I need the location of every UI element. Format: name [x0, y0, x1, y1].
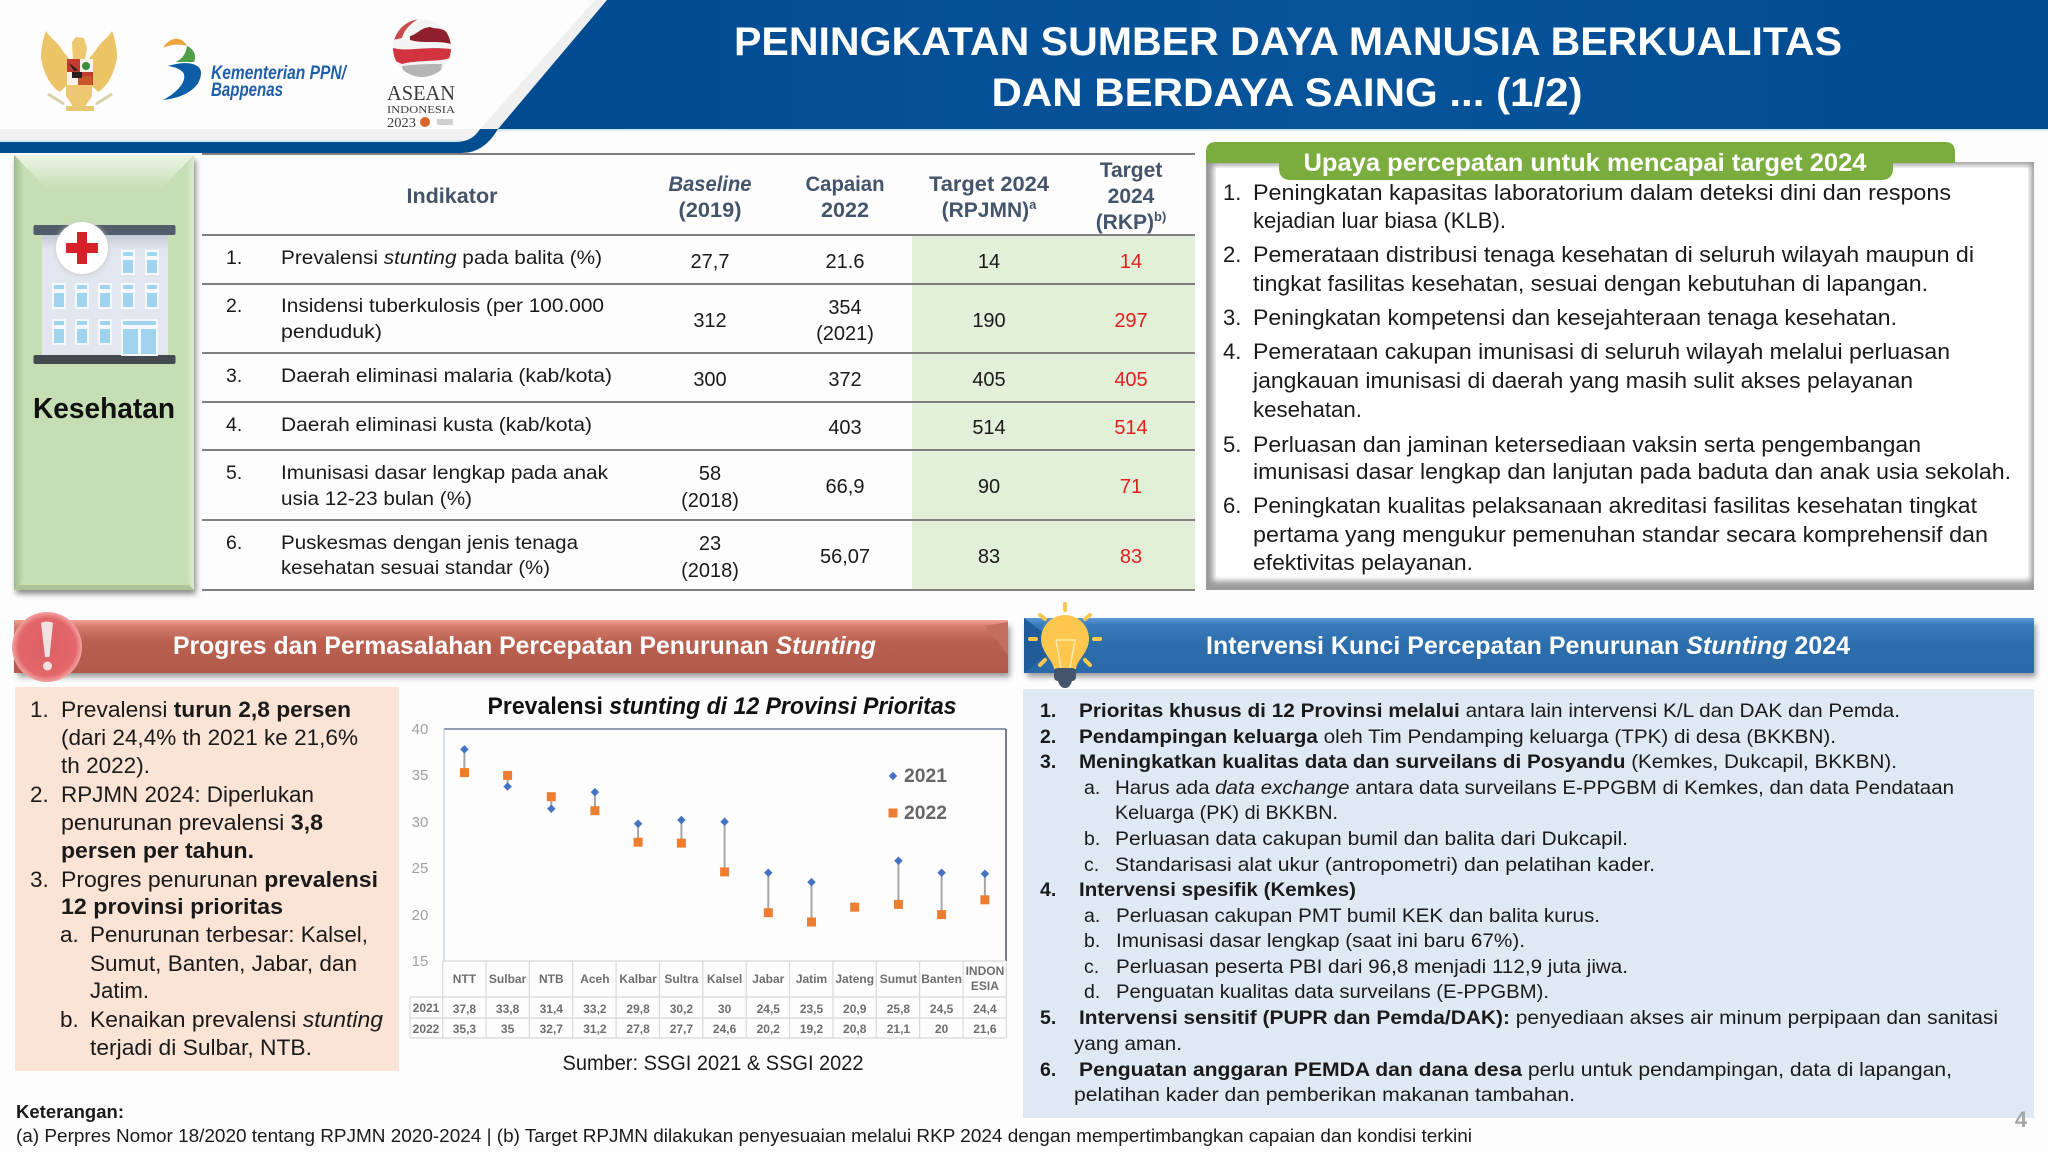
- table: health indicators: [202, 154, 1195, 590]
- item 6: pertama yang mengukur pemenuhan standar secara komprehensif dan: [1253, 522, 1988, 547]
- legend: 2021: [904, 766, 947, 787]
- note 3: Kenaikan prevalensi stunting: [90, 1007, 383, 1032]
- note 3: Sumut, Banten, Jabar, dan: [90, 951, 357, 976]
- note 2: penurunan prevalensi 3,8: [61, 810, 323, 835]
- item 5: imunisasi dasar lengkap dan lanjutan pada baduta dan anak usia sekolah.: [1253, 459, 2011, 484]
- green heading tab: [1206, 142, 1955, 180]
- row 6: (2018): [681, 560, 739, 582]
- intervention 3: 3.: [1040, 751, 1056, 773]
- row 6: [226, 532, 1142, 582]
- panel: Kesehatan sector: [14, 155, 196, 594]
- item 4: [1223, 339, 1950, 422]
- intervention 4: b.: [1084, 930, 1100, 952]
- data table 2022 values: 21,6: [973, 1022, 997, 1036]
- footnote: Keterangan:: [16, 1101, 124, 1122]
- intervention 3: Harus ada data exchange antara data surveilans E-PPGBM di Kemkes, dan data Pendataan: [1115, 777, 1954, 799]
- y axis labels: 25: [412, 860, 428, 877]
- row 5: usia 12-23 bulan (%): [281, 488, 472, 510]
- item 2: Pemerataan distribusi tenaga kesehatan di seluruh wilayah maupun di: [1253, 242, 1974, 267]
- row 6: 6.: [226, 532, 242, 554]
- intervention 4: d.: [1084, 981, 1100, 1003]
- data table 2021 values: [413, 1001, 997, 1016]
- table header row: Capaian: [806, 173, 884, 196]
- row 2: Insidensi tuberkulosis (per 100.000: [281, 295, 604, 317]
- data table 2021 values: 30,2: [670, 1002, 693, 1016]
- chart source: Sumber: SSGI 2021 & SSGI 2022: [562, 1052, 864, 1075]
- data table 2022 values: 20,2: [757, 1022, 780, 1036]
- page number: 4: [2015, 1107, 2028, 1132]
- row 3: 405: [972, 369, 1006, 391]
- logo: ASEAN Indonesia 2023: [387, 19, 455, 131]
- intervention 5: 5.: [1040, 1007, 1056, 1029]
- row 4: [226, 414, 1148, 439]
- note 3: Penurunan terbesar: Kalsel,: [90, 922, 368, 947]
- connectors: [464, 749, 985, 922]
- row 5: [226, 462, 1142, 512]
- title: PENINGKATAN SUMBER DAYA MANUSIA BERKUALITAS: [734, 20, 1842, 64]
- data table 2022 values: 24,6: [713, 1022, 737, 1036]
- item 6: [1223, 493, 1988, 575]
- data table 2022 values: 21,1: [887, 1022, 910, 1036]
- logo: ASEAN Indonesia 2023: INDONESIA: [387, 104, 455, 116]
- data table province labels: Sultra: [664, 972, 699, 986]
- table header row: Target: [1100, 159, 1162, 182]
- y axis labels: [412, 721, 428, 970]
- logo: Kementerian PPN/Bappenas: Bappenas: [211, 80, 283, 101]
- note 1: Prevalensi turun 2,8 persen: [61, 697, 351, 722]
- title: [734, 20, 1842, 115]
- logo: Kementerian PPN/Bappenas: Kementerian PPN/: [211, 63, 347, 84]
- row 3: 300: [693, 369, 727, 391]
- data table province labels: ESIA: [971, 979, 999, 993]
- row 2: 190: [972, 310, 1006, 332]
- heading: Kesehatan: Kesehatan: [33, 393, 175, 425]
- y axis labels: 40: [412, 721, 428, 738]
- item 1: 1.: [1223, 180, 1241, 205]
- row 1: 1.: [226, 247, 242, 269]
- note 3: a.: [60, 922, 79, 947]
- row 6: 56,07: [820, 546, 870, 568]
- banner: Progres dan Permasalahan: Progres dan Permasalahan Percepatan Penurunan Stunting: [173, 632, 876, 660]
- row 5: 90: [978, 476, 1000, 498]
- table header row: Target 2024: [929, 173, 1049, 196]
- item 6: 6.: [1223, 493, 1241, 518]
- data table province labels: NTB: [539, 972, 564, 986]
- intervention 3: b.: [1084, 828, 1100, 850]
- series 2022 markers: [460, 768, 989, 926]
- data table 2021 values: 2021: [413, 1001, 440, 1015]
- intervention 3: Meningkatkan kualitas data dan surveilans di Posyandu (Kemkes, Dukcapil, BKKBN).: [1079, 751, 1897, 773]
- data table 2021 values: 25,8: [887, 1002, 910, 1016]
- item 1: kejadian luar biasa (KLB).: [1253, 208, 1506, 233]
- data table 2021 values: 20,9: [843, 1002, 867, 1016]
- table header row: a: [1029, 197, 1037, 212]
- item 2: 2.: [1223, 242, 1241, 267]
- note 1: th 2022).: [61, 753, 150, 778]
- row 2: 2.: [226, 295, 242, 317]
- table header row: Baseline: [668, 173, 752, 196]
- item 3: 3.: [1223, 305, 1241, 330]
- logo: ASEAN Indonesia 2023: ASEAN: [387, 81, 455, 105]
- item 5: 5.: [1223, 432, 1241, 457]
- intervention 4: Imunisasi dasar lengkap (saat ini baru 67%).: [1116, 930, 1525, 952]
- intervention 3: a.: [1084, 777, 1100, 799]
- item 4: jangkauan imunisasi di daerah yang masih sulit akses pelayanan: [1252, 368, 1913, 393]
- table header row: (RKP): [1096, 211, 1154, 234]
- row 5: Imunisasi dasar lengkap pada anak: [281, 462, 608, 484]
- data table province labels: NTT: [453, 972, 477, 986]
- item 4: 4.: [1223, 339, 1241, 364]
- data table 2021 values: 24,5: [930, 1002, 954, 1016]
- row 4: 403: [828, 417, 862, 439]
- intervention 4: Intervensi spesifik (Kemkes): [1079, 879, 1356, 901]
- row 4: 514: [972, 417, 1006, 439]
- data table 2021 values: 29,8: [626, 1002, 650, 1016]
- intervention 4: 4.: [1040, 879, 1056, 901]
- item 6: efektivitas pelayanan.: [1253, 550, 1473, 575]
- banner: Intervensi Kunci: Intervensi Kunci Percepatan Penurunan Stunting 2024: [1206, 632, 1850, 660]
- data table 2021 values: 23,5: [800, 1002, 824, 1016]
- note 3: b.: [60, 1007, 79, 1032]
- data table 2022 values: 19,2: [800, 1022, 824, 1036]
- row 3: 405: [1114, 369, 1148, 391]
- data table 2022 values: 35: [501, 1022, 515, 1036]
- series 2021 markers: [460, 745, 989, 910]
- intervention 6: Penguatan anggaran PEMDA dan dana desa perlu untuk pendampingan, data di lapangan,: [1079, 1059, 1952, 1081]
- row 5: (2018): [681, 490, 739, 512]
- table header row: (RPJMN): [942, 199, 1029, 222]
- intervention 3: Perluasan data cakupan bumil dan balita dari Dukcapil.: [1115, 828, 1628, 850]
- data table 2021 values: 31,4: [540, 1002, 563, 1016]
- row 1: 21.6: [826, 251, 864, 273]
- data table province labels: Kalsel: [707, 972, 742, 986]
- intervention 1: 1.: [1040, 700, 1056, 722]
- intervention 3: c.: [1084, 854, 1099, 876]
- intervention 3: [1040, 751, 1954, 876]
- data table 2022 values: 31,2: [583, 1022, 607, 1036]
- data table 2021 values: 33,8: [496, 1002, 520, 1016]
- data table 2021 values: 33,2: [583, 1002, 607, 1016]
- note 2: 2.: [30, 782, 49, 807]
- chart title: Prevalensi stunting di 12 Provinsi Prioritas: [488, 693, 956, 720]
- icon: hospital building: [34, 222, 176, 364]
- y axis labels: 20: [412, 907, 428, 924]
- row 1: 14: [1120, 251, 1142, 273]
- row 3: [226, 365, 1148, 391]
- row 2: [226, 295, 1148, 345]
- row 2: 312: [693, 310, 727, 332]
- green heading tab: Upaya percepatan untuk mencapai target 2024: [1304, 149, 1867, 177]
- intervention 3: Standarisasi alat ukur (antropometri) dan pelatihan kader.: [1115, 854, 1655, 876]
- data table province labels: Jatim: [796, 972, 827, 986]
- row 4: Daerah eliminasi kusta (kab/kota): [281, 414, 592, 436]
- note 3: terjadi di Sulbar, NTB.: [90, 1035, 312, 1060]
- note 3: [30, 867, 383, 1060]
- row 3: Daerah eliminasi malaria (kab/kota): [281, 365, 612, 387]
- row 5: 71: [1120, 476, 1142, 498]
- item 6: Peningkatan kualitas pelaksanaan akreditasi fasilitas kesehatan tingkat: [1253, 493, 1977, 518]
- header band: [0, 0, 2048, 153]
- data table province labels: Sulbar: [489, 972, 527, 986]
- intervention 4: Penguatan kualitas data surveilans (E-PPGBM).: [1116, 981, 1549, 1003]
- y axis labels: 35: [412, 767, 428, 784]
- row 6: 83: [1120, 546, 1142, 568]
- row 1: Prevalensi stunting pada balita (%): [281, 247, 602, 269]
- note 3: 12 provinsi prioritas: [61, 894, 283, 919]
- row 6: Puskesmas dengan jenis tenaga: [281, 532, 578, 554]
- data table 2022 values: 27,7: [670, 1022, 693, 1036]
- table header row: [406, 159, 1166, 234]
- data table 2021 values: 37,8: [453, 1002, 476, 1016]
- item 4: kesehatan.: [1253, 397, 1362, 422]
- item 5: Perluasan dan jaminan ketersediaan vaksin serta pengembangan: [1253, 432, 1921, 457]
- data table province labels: Kalbar: [619, 972, 657, 986]
- row 2: 354: [828, 297, 862, 319]
- chart: stunting prevalence in 12 priority provinces: [410, 693, 1006, 1075]
- banner: Progres dan Permasalahan: [12, 612, 1010, 682]
- row 4: 4.: [226, 414, 242, 436]
- intervention 4: Perluasan cakupan PMT bumil KEK dan balita kurus.: [1116, 905, 1600, 927]
- intervention 5: yang aman.: [1074, 1033, 1182, 1055]
- row 6: kesehatan sesuai standar (%): [281, 557, 550, 579]
- row 2: 297: [1114, 310, 1148, 332]
- panel: Upaya percepatan: [1206, 142, 2034, 590]
- y axis labels: 30: [412, 814, 428, 831]
- data table 2022 values: 35,3: [453, 1022, 476, 1036]
- intervention 1: Prioritas khusus di 12 Provinsi melalui antara lain intervensi K/L dan DAK dan Pemda.: [1079, 700, 1900, 722]
- note 2: RPJMN 2024: Diperlukan: [61, 782, 314, 807]
- data table 2021 values: 24,5: [757, 1002, 780, 1016]
- data table 2021 values: 30: [718, 1002, 732, 1016]
- data table 2022 values: [413, 1022, 997, 1036]
- intervention 4: Perluasan peserta PBI dari 96,8 menjadi 112,9 juta jiwa.: [1116, 956, 1628, 978]
- note 3: Jatim.: [90, 978, 149, 1003]
- table header row: Indikator: [406, 185, 498, 208]
- row 3: 3.: [226, 365, 242, 387]
- row 5: 66,9: [826, 476, 864, 498]
- icon: exclamation circle: [12, 612, 82, 682]
- y axis labels: 15: [412, 953, 428, 970]
- title: DAN BERDAYA SAING ... (1/2): [992, 71, 1582, 115]
- footnote: [16, 1101, 1472, 1146]
- note 2: [30, 782, 323, 863]
- item 1: Peningkatan kapasitas laboratorium dalam deteksi dini dan respons: [1253, 180, 1951, 205]
- intervention 4: a.: [1084, 905, 1100, 927]
- row 5: 58: [699, 463, 721, 485]
- note 1: (dari 24,4% th 2021 ke 21,6%: [61, 725, 358, 750]
- item 3: Peningkatan kompetensi dan kesejahteraan tenaga kesehatan.: [1253, 305, 1897, 330]
- intervention 6: 6.: [1040, 1059, 1056, 1081]
- row 1: 27,7: [691, 251, 729, 273]
- note 1: [30, 697, 358, 778]
- logo: Kementerian PPN/Bappenas: [163, 39, 347, 101]
- data table 2022 values: 20,8: [843, 1022, 867, 1036]
- data table 2022 values: 32,7: [540, 1022, 563, 1036]
- note 1: 1.: [30, 697, 49, 722]
- intervention 5: Intervensi sensitif (PUPR dan Pemda/DAK): penyediaan akses air minum perpipaan dan sanitasi: [1079, 1007, 1998, 1029]
- row 2: (2021): [816, 323, 874, 345]
- legend: 2022: [904, 803, 947, 824]
- item 2: [1223, 242, 1974, 296]
- table header row: 2022: [821, 199, 869, 222]
- footnote: (a) Perpres Nomor 18/2020 tentang RPJMN 2020-2024 | (b) Target RPJMN dilakukan penyesuaian melalui RKP 2024 dengan mempertimbangkan capaian dan kondisi terkini: [16, 1125, 1472, 1146]
- intervention 4: c.: [1084, 956, 1099, 978]
- data table province labels: Jateng: [835, 972, 874, 986]
- table header row: b): [1154, 209, 1166, 224]
- data table grid: [410, 961, 1006, 1038]
- panel: stunting progress notes: [15, 687, 399, 1071]
- note 3: Progres penurunan prevalensi: [61, 867, 378, 892]
- data table province labels: Jabar: [752, 972, 785, 986]
- item 5: [1223, 432, 2011, 484]
- intervention 2: Pendampingan keluarga oleh Tim Pendamping keluarga (TPK) di desa (BKKBN).: [1079, 726, 1836, 748]
- row 2: penduduk): [281, 321, 382, 343]
- legend: [888, 766, 947, 824]
- data table 2022 values: 20: [935, 1022, 949, 1036]
- row 5: 5.: [226, 462, 242, 484]
- row 1: 14: [978, 251, 1000, 273]
- note 3: 3.: [30, 867, 49, 892]
- data table province labels: Banten: [921, 972, 962, 986]
- logo: Garuda Pancasila: [41, 31, 117, 111]
- data table province labels: Sumut: [880, 972, 917, 986]
- intervention 3: Keluarga (PK) di BKKBN.: [1115, 802, 1338, 824]
- intervention 6: [1040, 1059, 1952, 1106]
- logo: ASEAN Indonesia 2023: 2023: [387, 116, 416, 131]
- item 4: Pemerataan cakupan imunisasi di seluruh wilayah melalui perluasan: [1253, 339, 1950, 364]
- icon: light bulb: [1030, 604, 1100, 688]
- intervention 5: [1040, 1007, 1998, 1055]
- intervention 6: pelatihan kader dan pemberikan makanan tambahan.: [1074, 1084, 1575, 1106]
- item 1: [1223, 180, 1951, 233]
- panel: key interventions: [1023, 689, 2034, 1118]
- plot frame: [444, 729, 1006, 961]
- row 4: 514: [1114, 417, 1148, 439]
- table header row: 2024: [1108, 185, 1155, 208]
- data table 2022 values: 27,8: [626, 1022, 650, 1036]
- data table province labels: INDON: [966, 964, 1004, 978]
- note 2: persen per tahun.: [61, 838, 254, 863]
- row 6: 23: [699, 533, 721, 555]
- data table province labels: [453, 964, 1004, 993]
- intervention 4: [1040, 879, 1628, 1003]
- data table 2022 values: 2022: [413, 1022, 440, 1036]
- table header row: (2019): [678, 199, 742, 222]
- data table 2021 values: 24,4: [973, 1002, 997, 1016]
- banner: Intervensi Kunci: [1024, 604, 2036, 688]
- item 2: tingkat fasilitas kesehatan, sesuai dengan kebutuhan di lapangan.: [1253, 271, 1928, 296]
- row 3: 372: [828, 369, 862, 391]
- row 6: 83: [978, 546, 1000, 568]
- row 1: [226, 247, 1142, 273]
- intervention 2: 2.: [1040, 726, 1056, 748]
- data table province labels: Aceh: [580, 972, 610, 986]
